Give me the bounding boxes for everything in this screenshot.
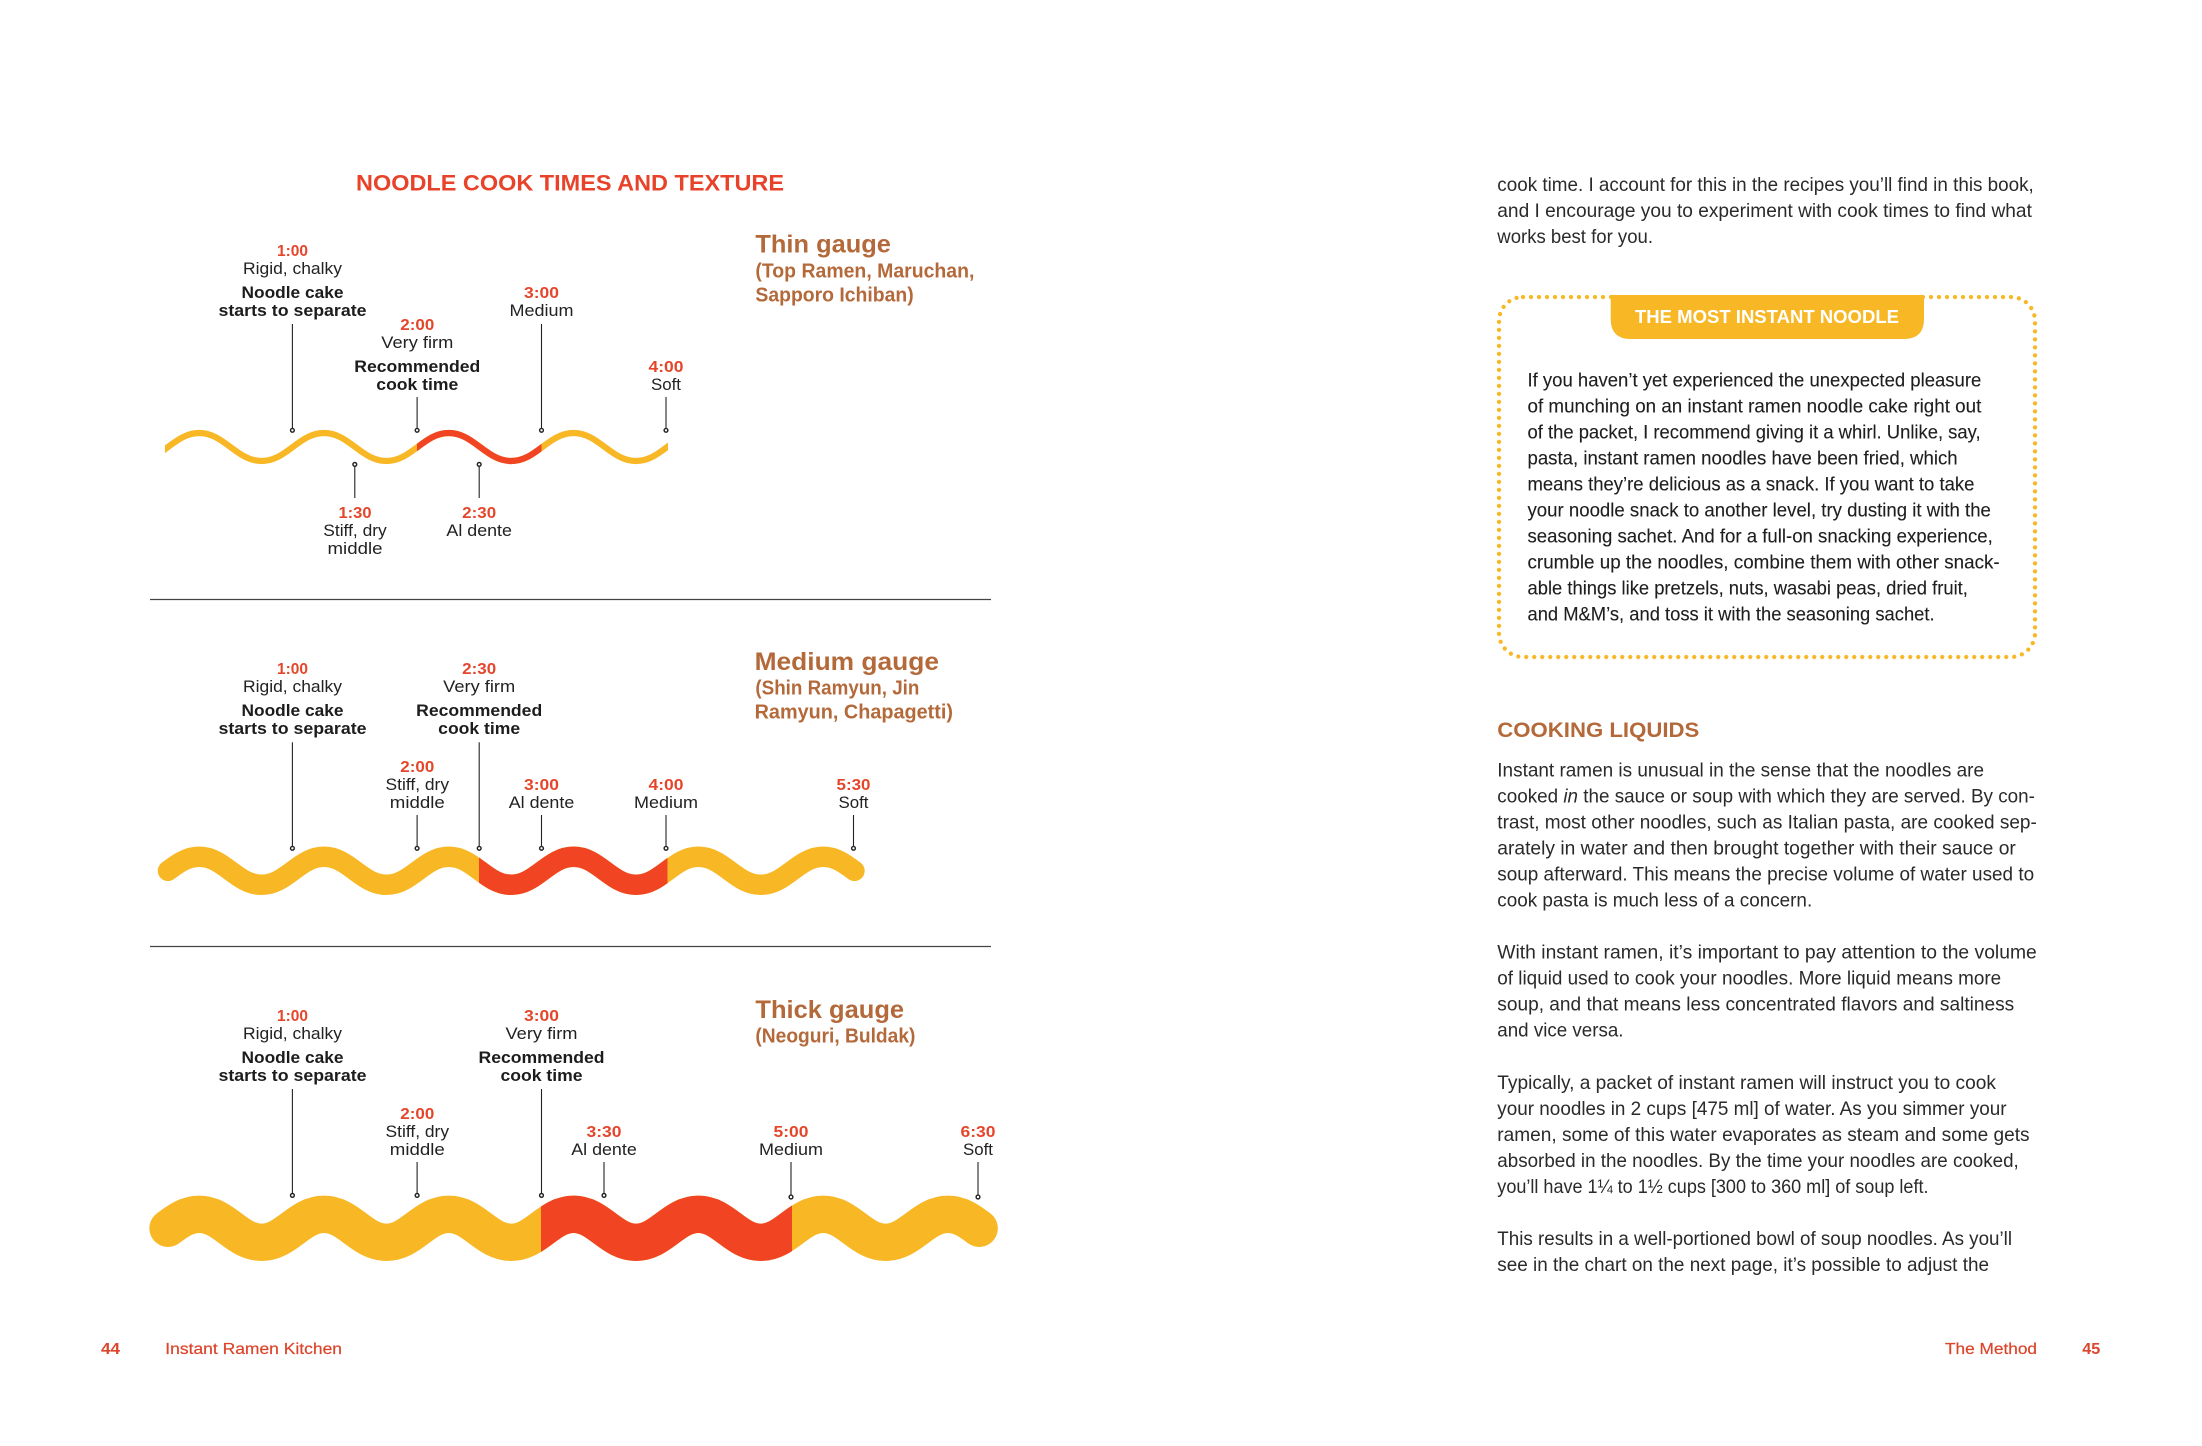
medium 1:00 label: starts to separate <box>218 720 366 738</box>
thin 1:00 label: Rigid, chalky <box>243 260 343 278</box>
medium 2:30 label: 2:30 <box>462 661 496 678</box>
medium 5:30 label: Soft <box>838 794 869 812</box>
callout body text: If you haven’t yet experienced the unexpected pleasure <box>1528 370 1981 392</box>
body paragraph 3: absorbed in the noodles. By the time your noodles are cooked, <box>1497 1150 2019 1172</box>
body paragraph 2: soup, and that means less concentrated flavors and saltiness <box>1497 994 2014 1016</box>
callout body text: crumble up the noodles, combine them with other snack- <box>1528 552 2000 574</box>
thin 2:30 label: 2:30 <box>462 505 496 522</box>
thin 2:30 label: Al dente <box>446 522 512 540</box>
thin 1:30 label: middle <box>328 540 382 558</box>
thin gauge heading: Sapporo Ichiban) <box>755 285 914 307</box>
thick 3:30 label: 3:30 <box>586 1124 622 1141</box>
thin 2:00 label <box>354 317 480 432</box>
body paragraph 1: cooked in the sauce or soup with which they are served. By con- <box>1497 786 2035 808</box>
panel: thick gauge <box>168 996 996 1242</box>
thin 1:30 label: 1:30 <box>338 505 372 522</box>
section heading: cooking liquids: COOKING LIQUIDS <box>1497 719 1699 742</box>
intro text block: works best for you. <box>1496 226 1653 248</box>
body paragraph 4: This results in a well-portioned bowl of soup noodles. As you’ll <box>1497 1228 2012 1250</box>
medium gauge heading: Ramyun, Chapagetti) <box>755 701 953 723</box>
body paragraph 2: and vice versa. <box>1497 1020 1624 1042</box>
callout body text: able things like pretzels, nuts, wasabi peas, dried fruit, <box>1528 578 1968 600</box>
medium gauge heading: Medium gauge <box>755 648 939 676</box>
callout body text: of munching on an instant ramen noodle cake right out <box>1528 396 1982 418</box>
thin 4:00 label: 4:00 <box>648 359 684 376</box>
thick 3:00 label: Recommended <box>478 1049 604 1067</box>
body paragraph 1: soup afterward. This means the precise volume of water used to <box>1497 864 2034 886</box>
footer left: 44 <box>101 1341 120 1358</box>
thin 2:00 label: 2:00 <box>400 317 434 334</box>
thick 3:00 label: 3:00 <box>524 1008 559 1025</box>
footer left <box>101 1341 342 1358</box>
medium 3:00 label: Al dente <box>509 794 574 812</box>
body paragraph 1 <box>1497 760 2037 912</box>
thick gauge noodle wave <box>168 1214 979 1242</box>
medium 2:30 label: cook time <box>438 720 520 738</box>
intro text block: and I encourage you to experiment with cook times to find what <box>1497 200 2032 222</box>
body paragraph 1: arately in water and then brought together with their sauce or <box>1497 838 2016 860</box>
thick 2:00 label <box>386 1106 450 1197</box>
thin 1:00 label: 1:00 <box>277 243 308 260</box>
thin 1:00 label <box>218 243 366 432</box>
thick 3:00 label: cook time <box>500 1067 582 1085</box>
thick 2:00 label: 2:00 <box>400 1106 434 1123</box>
thin 2:30 label <box>446 462 512 540</box>
medium 4:00 label <box>634 777 698 850</box>
callout body text: seasoning sachet. And for a full-on snacking experience, <box>1528 526 1993 548</box>
body paragraph 4: see in the chart on the next page, it’s possible to adjust the <box>1497 1254 1989 1276</box>
thick 1:00 label: 1:00 <box>277 1008 308 1025</box>
medium 2:30 label: Recommended <box>416 702 542 720</box>
callout body text: your noodle snack to another level, try dusting it with the <box>1528 500 1991 522</box>
body paragraph 1: Instant ramen is unusual in the sense that the noodles are <box>1497 760 1984 782</box>
medium 2:30 label <box>416 661 542 850</box>
thick gauge heading: Thick gauge <box>755 996 904 1024</box>
footer right: 45 <box>2082 1341 2101 1358</box>
medium 4:00 label: 4:00 <box>648 777 684 794</box>
intro text block <box>1496 174 2034 248</box>
callout body text: pasta, instant ramen noodles have been fried, which <box>1528 448 1958 470</box>
medium 2:00 label: 2:00 <box>400 759 434 776</box>
body paragraph 3 <box>1497 1072 2030 1198</box>
body paragraph 3: ramen, some of this water evaporates as steam and some gets <box>1497 1124 2030 1146</box>
thick gauge heading <box>755 996 915 1047</box>
thick 3:00 label: Very firm <box>506 1025 578 1043</box>
medium 2:00 label <box>386 759 450 850</box>
thin 2:00 label: cook time <box>376 376 458 394</box>
callout body text: and M&M’s, and toss it with the seasoning sachet. <box>1528 604 1935 626</box>
footer left: Instant Ramen Kitchen <box>165 1341 342 1358</box>
callout heading tab <box>1611 295 1924 339</box>
thick 1:00 label: Noodle cake <box>242 1049 344 1067</box>
thick 2:00 label: Stiff, dry <box>386 1123 450 1141</box>
thick 6:30 label <box>960 1124 996 1199</box>
body paragraph 2 <box>1497 942 2037 1042</box>
thin 4:00 label: Soft <box>651 376 681 394</box>
thin gauge heading: Thin gauge <box>755 230 891 258</box>
thick 5:00 label <box>759 1124 823 1199</box>
thick 3:00 label <box>478 1008 604 1197</box>
medium gauge noodle wave <box>168 857 854 885</box>
thick 1:00 label: Rigid, chalky <box>243 1025 343 1043</box>
thin gauge heading <box>755 230 974 307</box>
body paragraph 2: of liquid used to cook your noodles. More liquid means more <box>1497 968 2001 990</box>
thick 5:00 label: 5:00 <box>774 1124 809 1141</box>
body paragraph 3: Typically, a packet of instant ramen will instruct you to cook <box>1497 1072 1996 1094</box>
thin 1:00 label: Noodle cake <box>242 284 344 302</box>
medium 1:00 label: 1:00 <box>277 661 308 678</box>
thin 3:00 label: Medium <box>510 302 574 320</box>
body paragraph 1: trast, most other noodles, such as Italian pasta, are cooked sep- <box>1497 812 2037 834</box>
body paragraph 2: With instant ramen, it’s important to pay attention to the volume <box>1497 942 2037 964</box>
medium 4:00 label: Medium <box>634 794 698 812</box>
thin gauge noodle wave <box>163 433 672 461</box>
thin gauge heading: (Top Ramen, Maruchan, <box>755 261 974 283</box>
body paragraph 1: cook pasta is much less of a concern. <box>1497 890 1812 912</box>
thick gauge heading: (Neoguri, Buldak) <box>755 1025 915 1047</box>
body paragraph 3: you’ll have 1¼ to 1½ cups [300 to 360 ml] of soup left. <box>1497 1176 1928 1198</box>
thin 4:00 label <box>648 359 684 432</box>
medium gauge heading: (Shin Ramyun, Jin <box>755 677 919 699</box>
medium 5:30 label <box>836 777 871 850</box>
medium 5:30 label: 5:30 <box>836 777 871 794</box>
thick 6:30 label: 6:30 <box>960 1124 996 1141</box>
title: NOODLE COOK TIMES AND TEXTURE <box>356 170 784 196</box>
panel: medium gauge <box>168 648 953 885</box>
footer right: The Method <box>1945 1341 2037 1358</box>
thick 3:30 label: Al dente <box>571 1141 637 1159</box>
medium 3:00 label: 3:00 <box>524 777 559 794</box>
callout body text: of the packet, I recommend giving it a whirl. Unlike, say, <box>1528 422 1981 444</box>
thick 1:00 label: starts to separate <box>218 1067 366 1085</box>
callout body text: means they’re delicious as a snack. If you want to take <box>1528 474 1974 496</box>
medium 1:00 label: Noodle cake <box>242 702 344 720</box>
thick 2:00 label: middle <box>390 1141 445 1159</box>
medium 2:30 label: Very firm <box>443 678 515 696</box>
thick 1:00 label <box>218 1008 366 1197</box>
intro text block: cook time. I account for this in the recipes you’ll find in this book, <box>1497 174 2034 196</box>
callout body text <box>1528 370 2000 626</box>
medium 2:00 label: middle <box>390 794 445 812</box>
thin 1:00 label: starts to separate <box>218 302 366 320</box>
medium gauge heading <box>755 648 953 723</box>
thin 3:00 label <box>510 285 574 432</box>
body paragraph 4 <box>1497 1228 2012 1276</box>
medium 1:00 label <box>218 661 366 850</box>
callout dotted border <box>1499 297 2035 657</box>
thin 2:00 label: Very firm <box>381 334 453 352</box>
medium 1:00 label: Rigid, chalky <box>243 678 343 696</box>
thick 3:30 label <box>571 1124 637 1197</box>
thick 5:00 label: Medium <box>759 1141 823 1159</box>
thin 2:00 label: Recommended <box>354 358 480 376</box>
thick 6:30 label: Soft <box>963 1141 993 1159</box>
medium 2:00 label: Stiff, dry <box>386 776 450 794</box>
panel: thin gauge <box>163 230 974 558</box>
body paragraph 3: your noodles in 2 cups [475 ml] of water. As you simmer your <box>1497 1098 2007 1120</box>
thin 1:30 label <box>323 462 388 558</box>
callout heading tab: THE MOST INSTANT NOODLE <box>1635 307 1899 327</box>
thin 1:30 label: Stiff, dry <box>323 522 388 540</box>
medium 3:00 label <box>509 777 574 850</box>
footer right <box>1945 1341 2101 1358</box>
callout: the most instant noodle <box>1499 295 2035 657</box>
thin 3:00 label: 3:00 <box>524 285 559 302</box>
